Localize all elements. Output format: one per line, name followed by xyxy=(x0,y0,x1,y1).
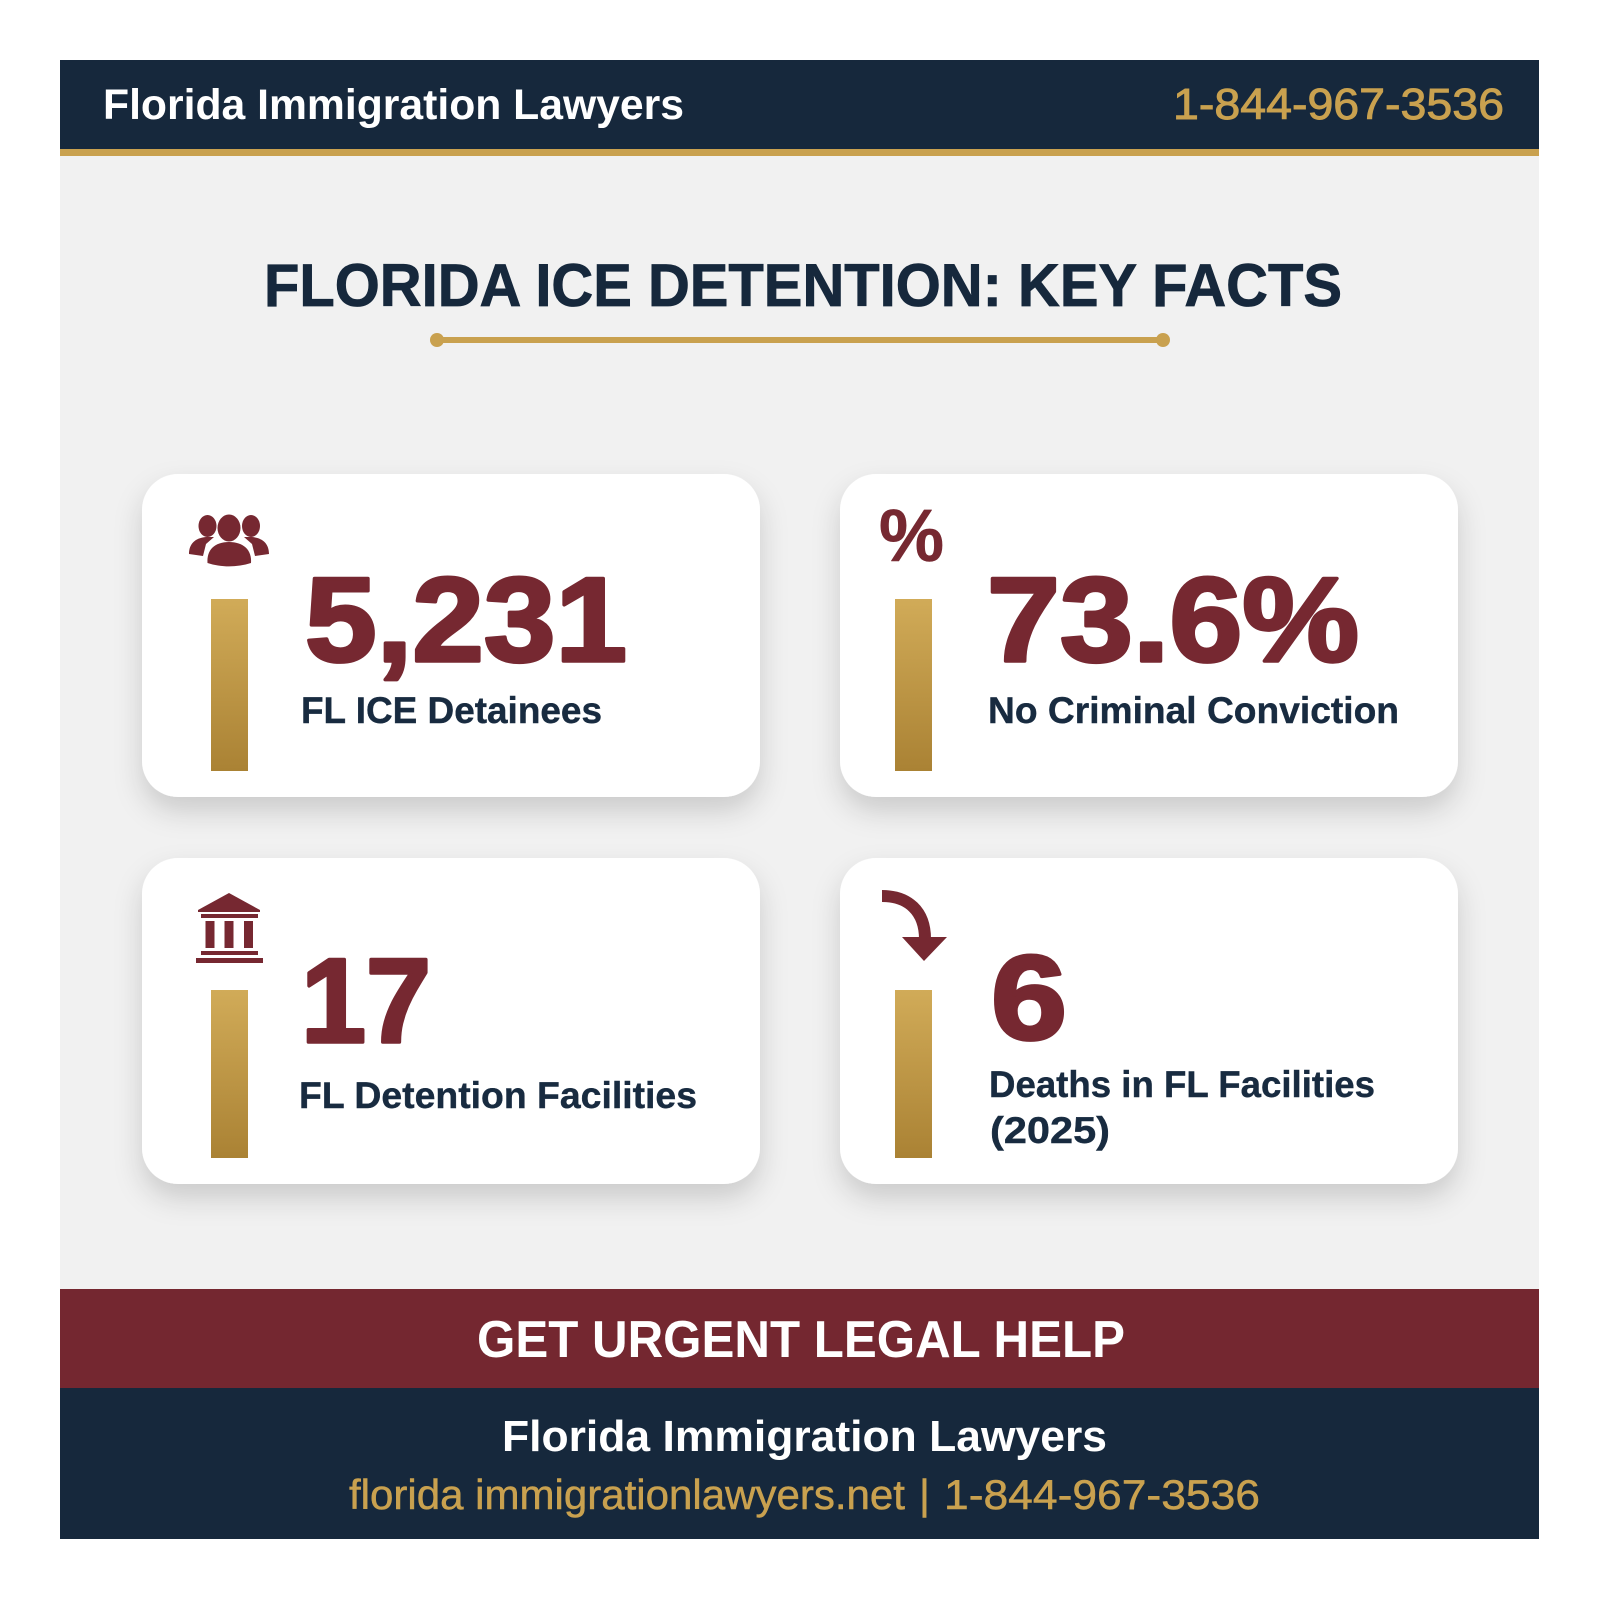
footer contact line: florida immigrationlawyers.net xyxy=(349,1471,905,1518)
gold bar xyxy=(895,990,932,1158)
stat label: Deaths in FL Facilities xyxy=(989,1064,1375,1105)
stat value: 17 xyxy=(301,934,431,1068)
stat label: FL ICE Detainees xyxy=(301,690,602,731)
title divider xyxy=(430,333,1170,347)
stat label xyxy=(989,1064,1375,1151)
footer contact line: | xyxy=(919,1471,930,1518)
stat value: 6 xyxy=(991,931,1067,1065)
stat label: FL Detention Facilities xyxy=(299,1075,697,1116)
gold bar xyxy=(211,599,248,771)
panel: FL ICE detainees xyxy=(142,474,760,797)
icon: people xyxy=(189,514,269,566)
footer xyxy=(60,1388,1539,1539)
header phone number: 1-844-967-3536 xyxy=(1173,80,1504,129)
gold bar xyxy=(211,990,248,1158)
banner text: GET URGENT LEGAL HELP xyxy=(477,1311,1125,1369)
call to action banner xyxy=(60,1289,1539,1388)
stat label: No Criminal Conviction xyxy=(988,690,1399,731)
panel: detention facilities xyxy=(142,858,760,1184)
header firm name: Florida Immigration Lawyers xyxy=(103,81,684,129)
panel: deaths in facilities xyxy=(840,858,1458,1184)
stat value: 5,231 xyxy=(305,553,627,687)
header bar xyxy=(60,60,1539,156)
gold bar xyxy=(895,599,932,771)
panel: no criminal conviction xyxy=(840,474,1458,797)
title: FLORIDA ICE DETENTION: KEY FACTS xyxy=(264,252,1342,319)
icon: courthouse xyxy=(196,893,263,963)
stat label: (2025) xyxy=(990,1110,1110,1151)
footer contact line xyxy=(349,1471,1260,1518)
stat value: 73.6% xyxy=(987,553,1359,687)
footer firm name: Florida Immigration Lawyers xyxy=(502,1412,1107,1461)
icon: percent: % xyxy=(879,494,944,577)
icon: curved arrow xyxy=(882,896,947,961)
footer contact line: 1-844-967-3536 xyxy=(944,1471,1260,1518)
